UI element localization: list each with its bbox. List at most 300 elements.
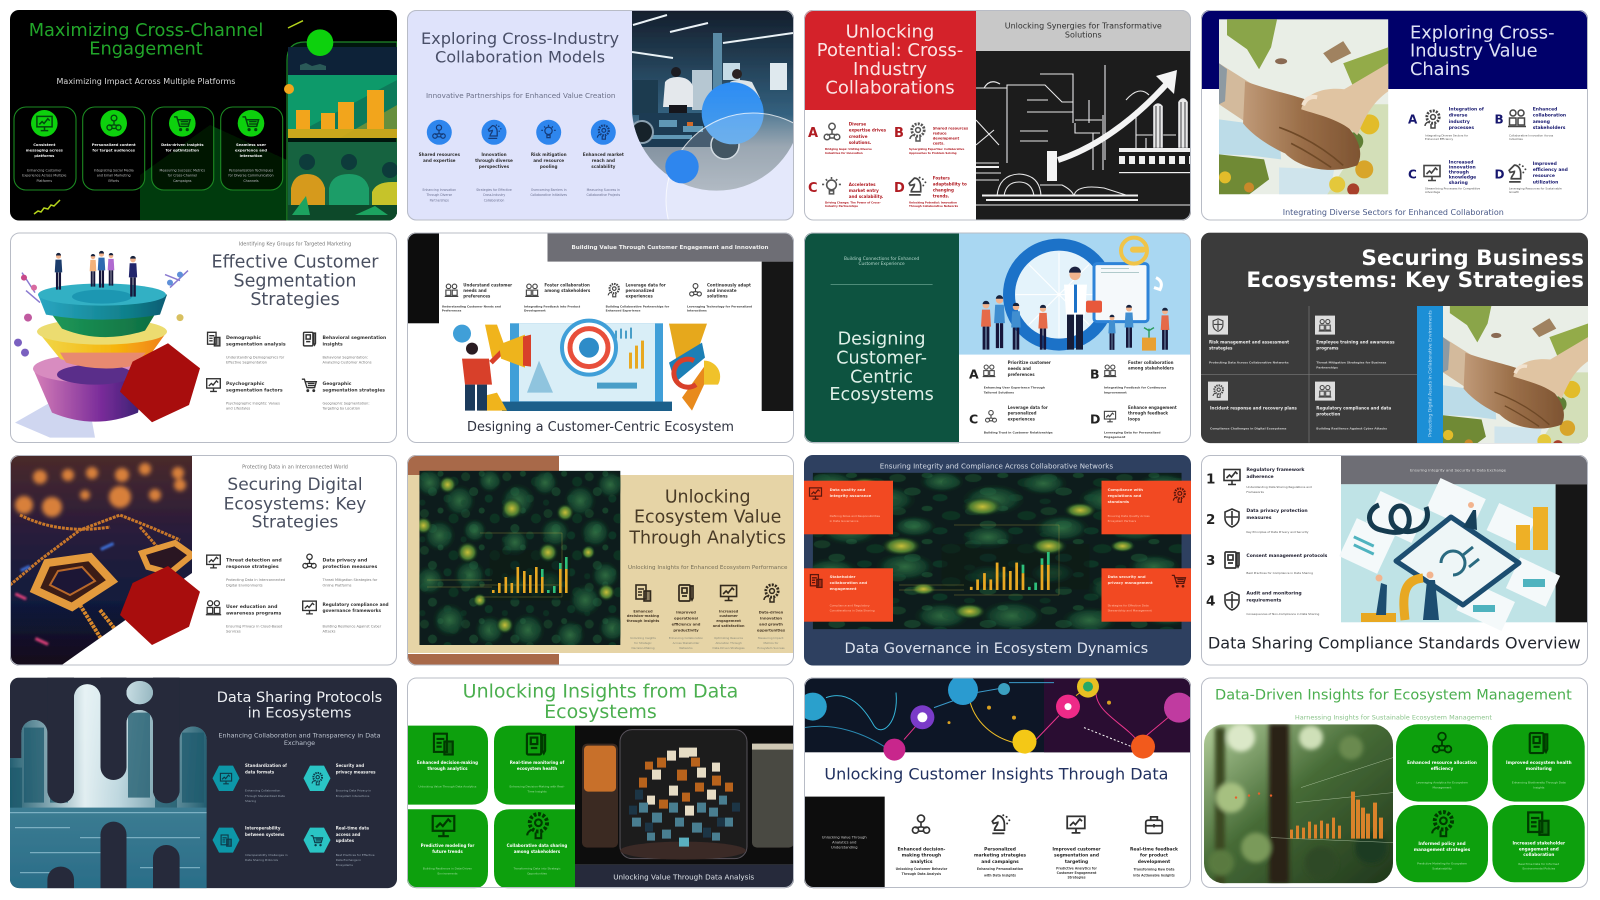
item: security and privacy: Ecosystem Interactions <box>336 794 370 798</box>
card: data-driven insights: for optimization <box>166 148 199 152</box>
item: demographic: segmentation analysis <box>226 342 286 348</box>
item D: Improved <box>1533 161 1557 167</box>
item B: among stakeholders <box>1128 366 1174 371</box>
item C: Building Trust in Customer Relationships <box>984 431 1053 435</box>
title: Exploring Cross-Industry <box>421 29 619 48</box>
item: decision-making: Decision-Making <box>632 646 655 650</box>
item: user education: User education and <box>226 604 277 610</box>
item: incident response <box>1208 382 1297 431</box>
item 4: 4 <box>1206 594 1215 610</box>
title: Unlocking Customer Insights Through Data <box>824 765 1168 784</box>
item D: adaptability to <box>933 182 967 186</box>
title: Ecosystems <box>544 701 657 723</box>
item D: Fosters <box>933 176 950 180</box>
item: risk management <box>1208 316 1289 365</box>
item A: Integrating Diverse Sectors for <box>1425 134 1469 138</box>
item: understand needs <box>442 283 512 313</box>
item: foster collaboration: among stakeholders <box>544 288 591 293</box>
item: innovation and growth: and growth <box>759 622 783 626</box>
item D: changing <box>933 188 954 192</box>
item C: Leverage data for <box>1008 405 1048 410</box>
card: real-time monitoring <box>494 726 575 805</box>
card: seamless user experience: Channels <box>243 179 259 183</box>
item: psychographic: segmentation factors <box>226 388 283 394</box>
item: threat detection <box>207 555 285 588</box>
item: behavioral: Analyzing Customer Actions <box>322 361 372 365</box>
people on funnel <box>55 251 137 297</box>
title panel: Industry <box>853 59 927 80</box>
card: predictive modeling: Building Resilience in Data-Driven <box>423 867 472 871</box>
benefit: innovation: Innovation <box>481 152 507 157</box>
item: real-time access: Best Practices for Effective <box>336 853 375 857</box>
item: leverage data: experiences <box>626 294 653 299</box>
item C: C <box>969 412 978 427</box>
green title panel: Ecosystems <box>829 385 934 405</box>
item: innovation and growth: innovation <box>760 616 782 620</box>
item D: Unlocking Potential: Innovation <box>909 200 957 204</box>
card: seamless user experience: Seamless user <box>236 143 266 147</box>
vertical label strip: Protecting Digital Assets in Collaborative Environments <box>1428 310 1434 437</box>
item: adapt and innovate: and innovate <box>707 288 737 293</box>
title: Strategies <box>250 290 340 310</box>
card: collaborative sharing: Collaborative data sharing <box>507 843 567 848</box>
benefit: market reach: reach and <box>592 158 615 163</box>
item: interoperability: Interoperability <box>245 826 281 831</box>
item B: Shared resources <box>933 126 968 130</box>
title: Through Analytics <box>628 528 786 548</box>
item B: Improvement <box>1104 391 1127 395</box>
item: foster collaboration: Integrating Feedback into Product <box>524 305 581 309</box>
card: data-driven insights: Campaigns <box>173 179 192 183</box>
card: collaborative sharing: Opportunities <box>527 872 547 876</box>
card: decision-making <box>407 726 488 805</box>
item C: through <box>1449 170 1469 176</box>
item 2: 2 <box>1206 512 1215 528</box>
photo: data canister <box>575 726 794 865</box>
item D: loops <box>1128 417 1141 422</box>
item C: Streamlining Processes for Competitive <box>1425 186 1480 190</box>
benefit: innovation <box>475 120 513 202</box>
item: decision-making: analytics <box>910 859 933 865</box>
caption band <box>575 865 794 889</box>
card: ecosystem health: Insights <box>1533 786 1545 790</box>
card: personalized content: Personalized content <box>92 143 136 147</box>
item C: sharing <box>1449 180 1468 186</box>
item: personalized marketing: Enhancing Personalization <box>977 867 1023 871</box>
header band <box>1341 455 1588 484</box>
item 3: 3 <box>1206 553 1215 569</box>
green title panel: Centric <box>850 367 913 387</box>
benefit: innovation: Collaboration <box>484 198 504 202</box>
item C: Industry Partnerships <box>825 204 858 208</box>
benefit: innovation: Cross-Industry <box>483 193 505 197</box>
item: foster collaboration: Development <box>524 309 546 313</box>
item B: Collaborative Innovation Across <box>1509 134 1554 138</box>
black side panel <box>804 797 885 889</box>
card: consistent messaging: Experience Across Multiple <box>22 174 66 178</box>
photo: workshop engineers <box>631 10 794 200</box>
card: real-time monitoring: Time Insights <box>526 790 547 794</box>
benefit: innovation: perspectives <box>479 164 510 169</box>
item: adapt and innovate: solutions <box>707 294 728 299</box>
card: predictive modeling: future trends <box>432 849 463 854</box>
card: policy strategies: Sustainability <box>1432 867 1452 871</box>
item D <box>1090 405 1177 439</box>
item: behavioral <box>304 332 386 365</box>
card: real-time monitoring: Real-time monitoring of <box>510 760 564 765</box>
item: foster collaboration <box>524 283 591 313</box>
title panel: Unlocking <box>846 21 934 42</box>
item: security and privacy: Ensuring Data Privacy in <box>336 789 371 793</box>
item: risk management: Risk management and assessment <box>1209 340 1289 345</box>
item: innovation and growth: Data-driven <box>759 610 784 614</box>
header band <box>548 233 794 262</box>
team illustration <box>959 233 1191 355</box>
item A: preferences <box>1008 372 1035 377</box>
item: regulatory compliance: Building Resilience Against Cyber Attacks <box>1316 427 1387 431</box>
item D: trends. <box>933 194 950 198</box>
item D <box>1494 161 1568 194</box>
item: geographic <box>302 379 385 411</box>
title: Collaboration Models <box>435 47 605 66</box>
benefit: shared resources: Enhancing Innovation <box>423 188 456 192</box>
item: employee training: programs <box>1316 346 1339 351</box>
item: understand needs: needs and <box>463 288 487 293</box>
card: decision-making: through analytics <box>427 766 468 771</box>
item: customer segmentation <box>1052 816 1101 880</box>
panel: slide 16 Data-Driven Insights <box>1201 678 1588 889</box>
item B: costs. <box>933 142 945 146</box>
photo: chain links <box>10 455 192 666</box>
card: ecosystem health: Improved ecosystem health <box>1506 760 1572 765</box>
panel: slide 10 Ecosystem Value Through Analytics <box>407 455 794 666</box>
item 2 <box>1206 508 1309 534</box>
card: stakeholder engagement: Increased stakeholder <box>1513 841 1566 846</box>
item A: Industries for Innovation <box>825 151 863 155</box>
panel: slide 5 Customer Segmentation <box>14 242 386 438</box>
card: seamless user experience: experience and <box>235 148 267 152</box>
card: data security: Stewardship and Management <box>1108 608 1153 612</box>
item: employee training <box>1315 316 1395 370</box>
card: ecosystem health: Enhancing Biodiversity Through Data <box>1512 781 1566 785</box>
card: policy strategies: Informed policy and <box>1418 841 1466 846</box>
item 2: Key Principles of Data Privacy and Security <box>1246 530 1309 534</box>
item B <box>1494 106 1566 141</box>
item: real-time access: access and <box>336 832 361 837</box>
item: data privacy <box>303 554 378 588</box>
item: standardization: Standardization of <box>245 763 287 768</box>
item C: C <box>1408 168 1417 182</box>
card: stakeholder engagement: engagement and <box>1519 846 1559 851</box>
card: data quality: Data quality and <box>830 487 865 492</box>
item: interoperability <box>212 826 288 862</box>
item C: C <box>808 181 818 196</box>
card: predictive modeling: Predictive modeling for <box>421 843 474 848</box>
panel: slide 4 Cross-Industry Value Chains <box>1201 10 1588 221</box>
item D: D <box>894 181 905 196</box>
title: Unlocking Insights from Data <box>463 681 738 703</box>
item: customer engagement: Data-Driven Strategies <box>713 646 745 650</box>
item: user education: Services <box>226 630 241 634</box>
item: operational efficiency <box>669 585 703 650</box>
item: psychographic: and Lifestyles <box>226 407 250 411</box>
title: Industry Value <box>1410 41 1538 62</box>
item A: Bridging Gaps: Uniting Diverse <box>825 147 872 151</box>
card: compliance: regulations and <box>1108 493 1142 498</box>
item B: Synergizing Expertise: Collaborative <box>909 147 964 151</box>
green title panel: Designing <box>838 329 926 349</box>
small heading: Protecting Data in an Interconnected World <box>242 464 348 470</box>
item C: market entry <box>849 188 879 193</box>
item: customer segmentation: Improved customer <box>1052 847 1101 853</box>
item D: Through Collaborative Networks <box>909 204 959 208</box>
photo: forest with orange data chart <box>1204 724 1393 888</box>
item C: experiences <box>1008 417 1035 422</box>
benefit: market reach: Enhanced market <box>583 152 624 157</box>
item: understand needs: Preferences <box>442 309 462 313</box>
item: real-time feedback: for product <box>1140 853 1168 859</box>
card: decision-making: Enhanced decision-making <box>417 760 478 765</box>
card: resource allocation: Enhanced resource allocation <box>1407 760 1477 765</box>
title: Data-Driven Insights for Ecosystem Management <box>1215 688 1572 704</box>
subtitle panel <box>976 10 1191 51</box>
benefit: market reach <box>583 120 624 197</box>
item: decision-making: decision-making <box>627 614 660 618</box>
title: Data Governance in Ecosystem Dynamics <box>845 641 1148 657</box>
item: demographic: Demographic <box>226 335 261 341</box>
item: decision-making: for Strategic <box>634 641 652 645</box>
item: geographic: Geographic Segmentation: <box>322 402 370 406</box>
card: ecosystem health: monitoring <box>1526 766 1552 771</box>
item B: B <box>1090 367 1100 382</box>
photo: handshake over map <box>1219 19 1388 195</box>
header band: Ensuring Integrity and Security in Data Exchange <box>1410 468 1507 472</box>
subtitle: Unlocking Insights for Enhanced Ecosystem Performance <box>628 565 788 571</box>
item: innovation and growth <box>757 585 786 650</box>
item B: Approaches to Problem Solving <box>909 151 957 155</box>
title: Ecosystems: Key <box>224 494 366 514</box>
panel: slide 1 Maximizing Cross-Channel Engagement <box>10 10 398 221</box>
item C <box>969 405 1053 435</box>
item: real-time feedback: Real-time feedback <box>1130 847 1178 853</box>
item: customer engagement: Increased <box>719 610 739 614</box>
card: compliance: Ecosystem Partners <box>1108 519 1137 523</box>
item: innovation and growth: Metrics for <box>764 641 779 645</box>
benefit: market reach: scalability <box>591 164 616 169</box>
item: security and privacy: privacy measures <box>336 770 376 775</box>
item D: D <box>1090 412 1100 427</box>
benefit: shared resources: Through Diverse <box>426 193 452 197</box>
card: stakeholder collaboration: Considerations in Data Sharing <box>830 608 875 612</box>
card: consistent messaging <box>14 107 76 190</box>
title: Chains <box>1410 59 1470 80</box>
title: Engagement <box>89 38 203 60</box>
card: policy strategies: management strategies <box>1414 847 1471 852</box>
item: real-time feedback: development <box>1138 859 1170 865</box>
card: stakeholder collaboration: engagement <box>830 586 857 591</box>
title: Strategies <box>252 512 339 532</box>
item: threat detection: Digital Environments <box>226 584 263 588</box>
item A: solutions. <box>849 140 872 145</box>
subtitle: Maximizing Impact Across Multiple Platforms <box>57 77 235 86</box>
green title panel: Building Connections for Enhanced <box>844 256 919 262</box>
card: seamless user experience <box>221 107 283 190</box>
item C: personalized <box>1008 411 1037 416</box>
card: policy strategies: Predictive Modeling for Ecosystem <box>1417 862 1467 866</box>
card: compliance: Ensuring Data Quality Across <box>1108 514 1150 518</box>
item: real-time feedback <box>1130 817 1178 878</box>
card: data quality: Defining Roles and Responsibilities <box>830 514 881 518</box>
item C: innovation <box>1449 164 1476 170</box>
item: decision-making: Through Data Analysis <box>902 872 941 876</box>
item A: Enhanced Efficiency <box>1425 137 1454 141</box>
title: Ecosystems: Key Strategies <box>1246 268 1584 293</box>
card: collaborative sharing <box>494 809 575 889</box>
panel: slide 14 Insights from Data Ecosystems <box>407 678 794 889</box>
benefit: shared resources: and expertise <box>423 158 456 163</box>
item: operational efficiency: Networks <box>679 646 693 650</box>
item C: Driving Change: The Power of Cross- <box>825 200 881 204</box>
item: customer segmentation: targeting <box>1065 859 1088 865</box>
item: geographic: Geographic <box>322 381 352 387</box>
title: Maximizing Cross-Channel <box>29 20 263 41</box>
red hexagon <box>120 343 200 422</box>
item: employee training: Partnerships <box>1316 366 1338 370</box>
benefit: innovation: through diverse <box>475 158 513 163</box>
item A: Prioritize customer <box>1008 360 1051 365</box>
green title panel: Customer Experience <box>858 261 905 267</box>
black side panel: Analytics and <box>832 841 856 845</box>
card: resource allocation: Management <box>1432 786 1452 790</box>
small heading: Identifying Key Groups for Targeted Marketing <box>239 242 351 248</box>
card: data-driven insights: Data-driven insights <box>161 143 204 147</box>
item: standardization: Enhancing Collaboration <box>245 789 281 793</box>
item: regulatory compliance <box>303 601 389 634</box>
benefit: market reach: Measuring Success in <box>587 188 620 192</box>
item 2: Data privacy protection <box>1246 508 1308 514</box>
item A: Tailored Solutions <box>984 391 1014 395</box>
card: collaborative sharing: among stakeholders <box>514 849 561 854</box>
item: real-time feedback: Transforming Raw Data <box>1134 868 1174 872</box>
item: regulatory compliance: Regulatory compliance and data <box>1316 406 1391 411</box>
item B: Integrating Feedback for Continuous <box>1104 386 1167 390</box>
item A: A <box>969 367 979 382</box>
decorative circle <box>307 29 333 56</box>
card: stakeholder engagement <box>1492 805 1585 882</box>
item: customer engagement: Optimizing Resource <box>714 636 743 640</box>
black side panel: Understanding <box>831 846 858 850</box>
card: compliance: standards <box>1108 499 1130 504</box>
item: operational efficiency: productivity <box>673 628 699 632</box>
item: decision-making: Unlocking Insights <box>630 636 656 640</box>
item D: resource <box>1533 173 1555 179</box>
item: customer segmentation: Predictive Analytics for <box>1056 867 1097 871</box>
card: decision-making: Unlocking Value Through Data Analytics <box>419 785 477 789</box>
caption band: Unlocking Value Through Data Analysis <box>613 873 754 882</box>
marketing illustration <box>453 321 720 411</box>
item D: efficiency and <box>1533 167 1568 173</box>
item: user education: Ensuring Privacy in Cloud-Based <box>226 624 282 628</box>
photo: forest with bar chart <box>804 471 1193 634</box>
item B: among <box>1533 120 1550 125</box>
panel: slide 2 Cross-Industry Collaboration Models <box>407 10 794 220</box>
item C: Advantage <box>1425 190 1440 194</box>
item: decision-making <box>896 815 948 876</box>
item: customer engagement: Allocation Through <box>715 641 742 645</box>
item B: B <box>1494 112 1504 126</box>
card: personalized content: Efforts <box>108 179 119 183</box>
item: real-time feedback: into Actionable Insights <box>1133 874 1175 878</box>
card: ecosystem health <box>1492 724 1585 802</box>
title: in Ecosystems <box>248 706 351 722</box>
item: personalized marketing: Personalized <box>984 847 1016 853</box>
benefit: shared resources <box>419 120 460 202</box>
item A: processes <box>1449 125 1474 131</box>
item: threat detection: Protecting Data in Interconnected <box>226 578 285 582</box>
card: stakeholder engagement: collaboration <box>1523 852 1554 857</box>
benefit: risk mitigation <box>530 120 567 197</box>
item A: Enhancing User Experience Through <box>984 386 1045 390</box>
item: risk management: Protecting Data Across Collaborative Networks <box>1209 361 1289 365</box>
item 2: measures <box>1246 515 1272 521</box>
item 1: Frameworks <box>1246 490 1264 494</box>
photo: forest with bar chart <box>414 469 626 650</box>
item: incident response: Incident response and recovery plans <box>1210 406 1297 411</box>
circuit network illustration <box>799 675 1194 761</box>
title: Securing Business <box>1361 246 1584 271</box>
title: Unlocking <box>665 488 751 508</box>
subtitle panel: Solutions <box>1065 31 1102 40</box>
item: real-time access: Data Exchange in <box>336 858 361 862</box>
benefit: market reach: Collaborative Projects <box>586 193 621 197</box>
item B <box>894 124 968 155</box>
item: behavioral: insights <box>322 342 343 348</box>
item: geographic: segmentation strategies <box>322 388 385 394</box>
subtitle: Harnessing Insights for Sustainable Ecosystem Management <box>1295 714 1492 722</box>
benefit: shared resources: Partnerships <box>430 198 449 202</box>
item B: B <box>894 126 904 141</box>
item: operational efficiency: operational <box>674 616 698 620</box>
panel: slide 15 Customer Insights Through Data <box>799 675 1194 889</box>
item C <box>1408 160 1480 194</box>
item C: knowledge <box>1449 174 1476 180</box>
item: regulatory compliance: protection <box>1316 412 1340 417</box>
title: Securing Digital <box>227 475 363 495</box>
item 1: Regulatory framework <box>1246 467 1305 473</box>
panel: slide 12 Data Sharing Compliance <box>1201 455 1588 666</box>
benefit: risk mitigation: Overcoming Barriers in <box>531 188 567 192</box>
item 1: adherence <box>1246 474 1274 480</box>
green title panel: Customer- <box>836 348 927 368</box>
card: resource allocation: Leveraging Analytics for Ecosystem <box>1416 781 1468 785</box>
item A <box>1408 106 1484 141</box>
card: compliance: Compliance with <box>1108 487 1143 492</box>
card: data quality: integrity assurance <box>830 493 872 498</box>
item A: A <box>808 126 818 141</box>
item: security and privacy <box>304 763 376 798</box>
item C <box>808 177 884 208</box>
card: data security: Strategies for Effective Data <box>1108 604 1149 608</box>
item B <box>1090 360 1174 395</box>
card: consistent messaging: messaging across <box>26 148 64 152</box>
item: regulatory compliance: Building Resilience Against Cyber <box>322 624 382 628</box>
item: data privacy: Data privacy and <box>322 558 367 564</box>
data documents illustration <box>1339 478 1588 631</box>
item: decision-making: Enhanced decision- <box>897 847 946 853</box>
item: understand needs: Understanding Customer Needs and <box>442 305 501 309</box>
item: decision-making: Enhanced <box>633 610 653 614</box>
subtitle: Innovative Partnerships for Enhanced Value Creation <box>426 91 615 100</box>
